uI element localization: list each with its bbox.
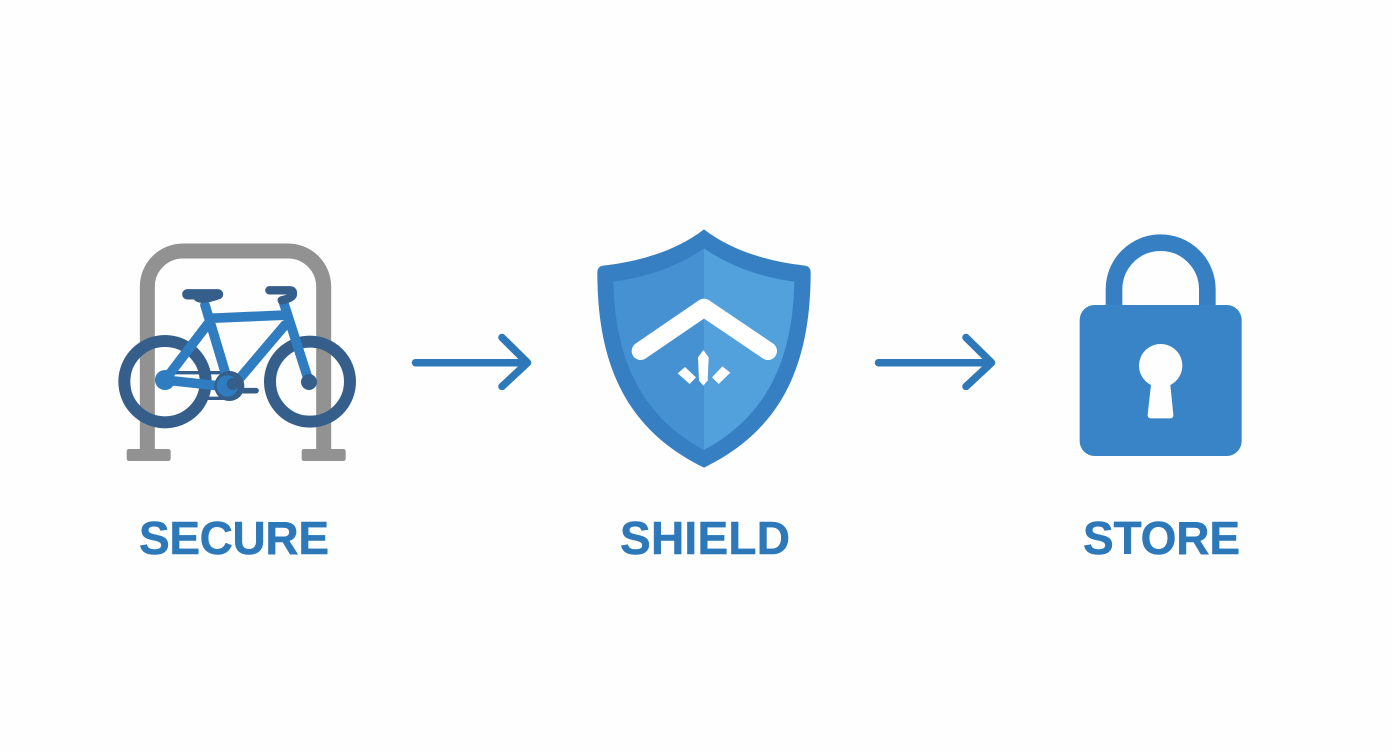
icon: padlock (1080, 243, 1242, 456)
arrow 1 (416, 338, 528, 386)
white chevron (641, 308, 768, 351)
shield right half (704, 248, 794, 450)
white spark marks (678, 350, 730, 386)
label: store: STORE (1083, 512, 1240, 564)
label: shield: SHIELD (620, 512, 790, 564)
padlock shackle (1114, 243, 1207, 308)
arrow 2 (878, 338, 992, 386)
label: secure: SECURE (139, 512, 329, 564)
bicycle wheels (124, 341, 350, 422)
saddle and handlebars (187, 290, 293, 300)
icon: bicycle locked to rack (124, 251, 350, 461)
shield left half (613, 248, 704, 450)
shield outer border (597, 229, 811, 468)
padlock body with keyhole (1080, 305, 1242, 456)
bike rack (127, 251, 346, 461)
bicycle frame (155, 302, 317, 401)
icon: shield (597, 229, 811, 468)
